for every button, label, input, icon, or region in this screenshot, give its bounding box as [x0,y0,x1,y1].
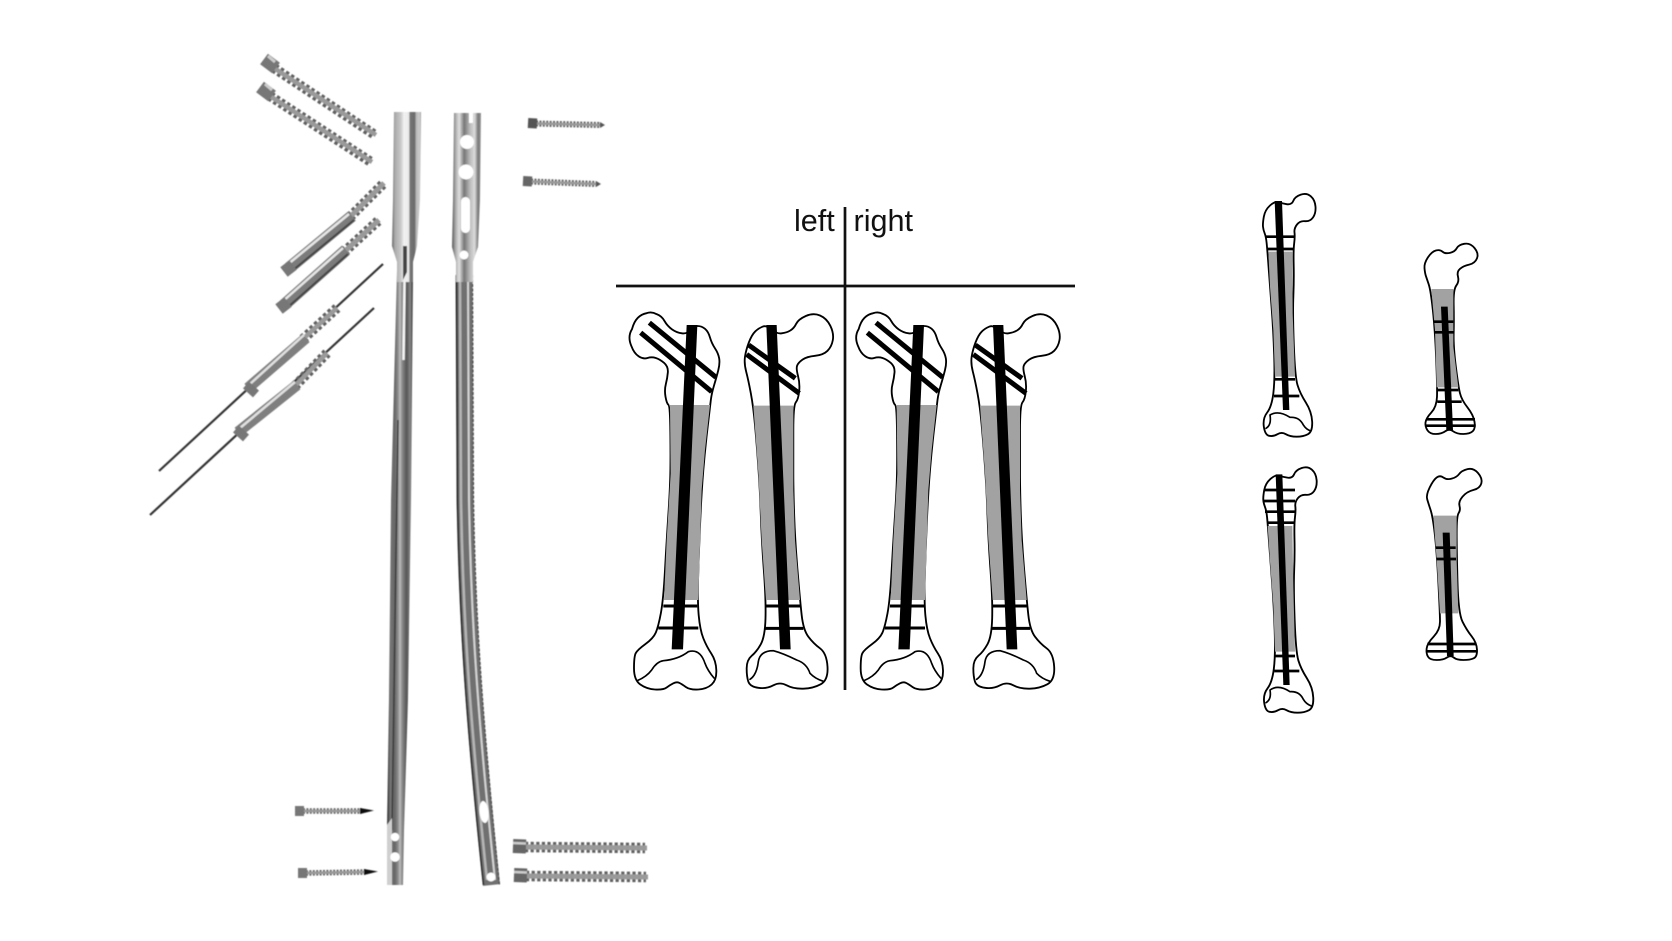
screw: bottom left 2 [298,869,378,875]
small femur: short distal nail, top row [1424,244,1478,434]
table axis lines [616,207,1075,690]
screw: bottom right 1 [513,843,647,848]
screw: bottom left 1 [295,808,374,814]
screw: bottom right 2 [514,872,648,877]
femur diagram: left, view B [745,314,833,689]
label: right: right [854,204,914,238]
left / right table [616,204,1075,690]
small femur: long nail, two proximal screws [1263,194,1316,437]
small femur: long nail, four proximal screws [1263,467,1317,713]
nail: side view, curved [452,111,500,885]
screw: right top 2 [523,181,601,187]
screw: proximal long 1 [264,56,376,135]
screw: proximal long 2 [260,84,372,162]
screw: right top 1 [528,122,605,128]
implant photographs [150,56,648,885]
femur diagram: right, view A [856,312,946,690]
screw with guide wire 1 [159,264,383,471]
label: left: left [794,204,835,238]
nail: front view [387,112,421,885]
lag screw 2 [279,220,379,309]
femur diagram: right, view B [971,314,1060,689]
femur diagram: left, view A [629,312,719,690]
small femur: short distal nail, bottom row [1426,469,1482,660]
screw with guide wire 2 [150,308,374,515]
lag screw 1 [284,183,384,272]
